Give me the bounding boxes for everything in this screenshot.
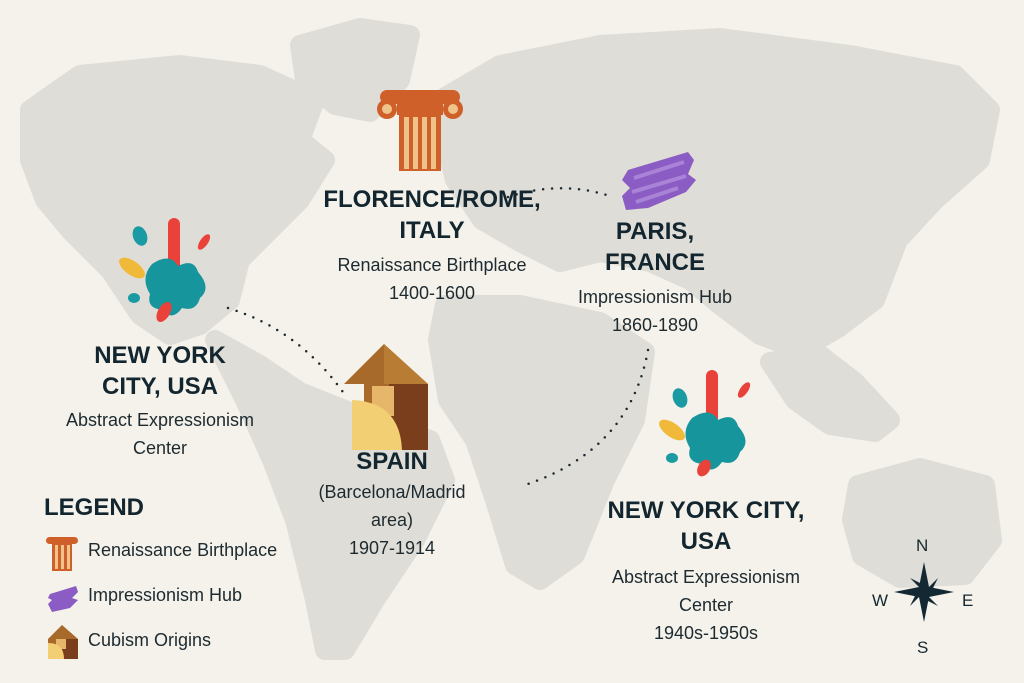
text: Paris details bbox=[578, 287, 732, 335]
compass: W bbox=[872, 591, 888, 610]
icon: purple brush bbox=[622, 152, 696, 210]
compass: N bbox=[916, 536, 928, 555]
text: Florence details: Renaissance Birthplace bbox=[337, 255, 527, 275]
text: Spain details: 1907-1914 bbox=[349, 538, 435, 558]
compass bbox=[872, 536, 973, 657]
text: Florence details bbox=[337, 255, 527, 303]
icon: splash right bbox=[659, 370, 750, 476]
heading: Florence: FLORENCE/ROME, bbox=[323, 186, 541, 213]
text: Spain details: area) bbox=[371, 510, 413, 530]
text: Florence details: 1400-1600 bbox=[389, 283, 475, 303]
text: New York right details: Center bbox=[679, 595, 733, 615]
legend item: impressionism: Impressionism Hub bbox=[88, 585, 242, 605]
heading: Spain: SPAIN bbox=[356, 448, 428, 475]
heading: New York right bbox=[608, 497, 804, 555]
compass: S bbox=[917, 638, 928, 657]
heading: New York left: NEW YORK bbox=[94, 342, 226, 369]
text: New York right details: 1940s-1950s bbox=[654, 623, 758, 643]
text: New York left details bbox=[66, 410, 254, 458]
icon: splash left bbox=[119, 218, 210, 322]
text: Paris details: 1860-1890 bbox=[612, 315, 698, 335]
heading: Florence bbox=[323, 186, 541, 244]
heading: Paris: FRANCE bbox=[605, 249, 705, 276]
legend item: cubism bbox=[48, 625, 211, 659]
icon: column bbox=[377, 90, 463, 171]
text: Spain details: (Barcelona/Madrid bbox=[318, 482, 466, 502]
heading: Paris: PARIS, bbox=[616, 218, 694, 245]
text: New York right details: Abstract Expressionism bbox=[612, 567, 800, 587]
text: Spain details bbox=[318, 482, 466, 558]
heading: New York right: USA bbox=[681, 528, 731, 555]
heading: Paris bbox=[605, 218, 705, 276]
legend item: cubism: Cubism Origins bbox=[88, 630, 211, 650]
legend bbox=[44, 494, 277, 659]
text: Paris details: Impressionism Hub bbox=[578, 287, 732, 307]
legend item: renaissance: Renaissance Birthplace bbox=[88, 540, 277, 560]
legend item: renaissance bbox=[46, 537, 277, 571]
text: New York right details bbox=[612, 567, 800, 643]
heading: New York left: CITY, USA bbox=[102, 373, 218, 400]
heading: New York right: NEW YORK CITY, bbox=[608, 497, 804, 524]
compass: E bbox=[962, 591, 973, 610]
icon: cubism house bbox=[344, 344, 428, 450]
text: New York left details: Abstract Expressionism bbox=[66, 410, 254, 430]
legend item: impressionism bbox=[48, 585, 242, 612]
legend title: LEGEND bbox=[44, 494, 144, 521]
heading: New York left bbox=[94, 342, 226, 400]
text: New York left details: Center bbox=[133, 438, 187, 458]
heading: Florence: ITALY bbox=[399, 217, 465, 244]
